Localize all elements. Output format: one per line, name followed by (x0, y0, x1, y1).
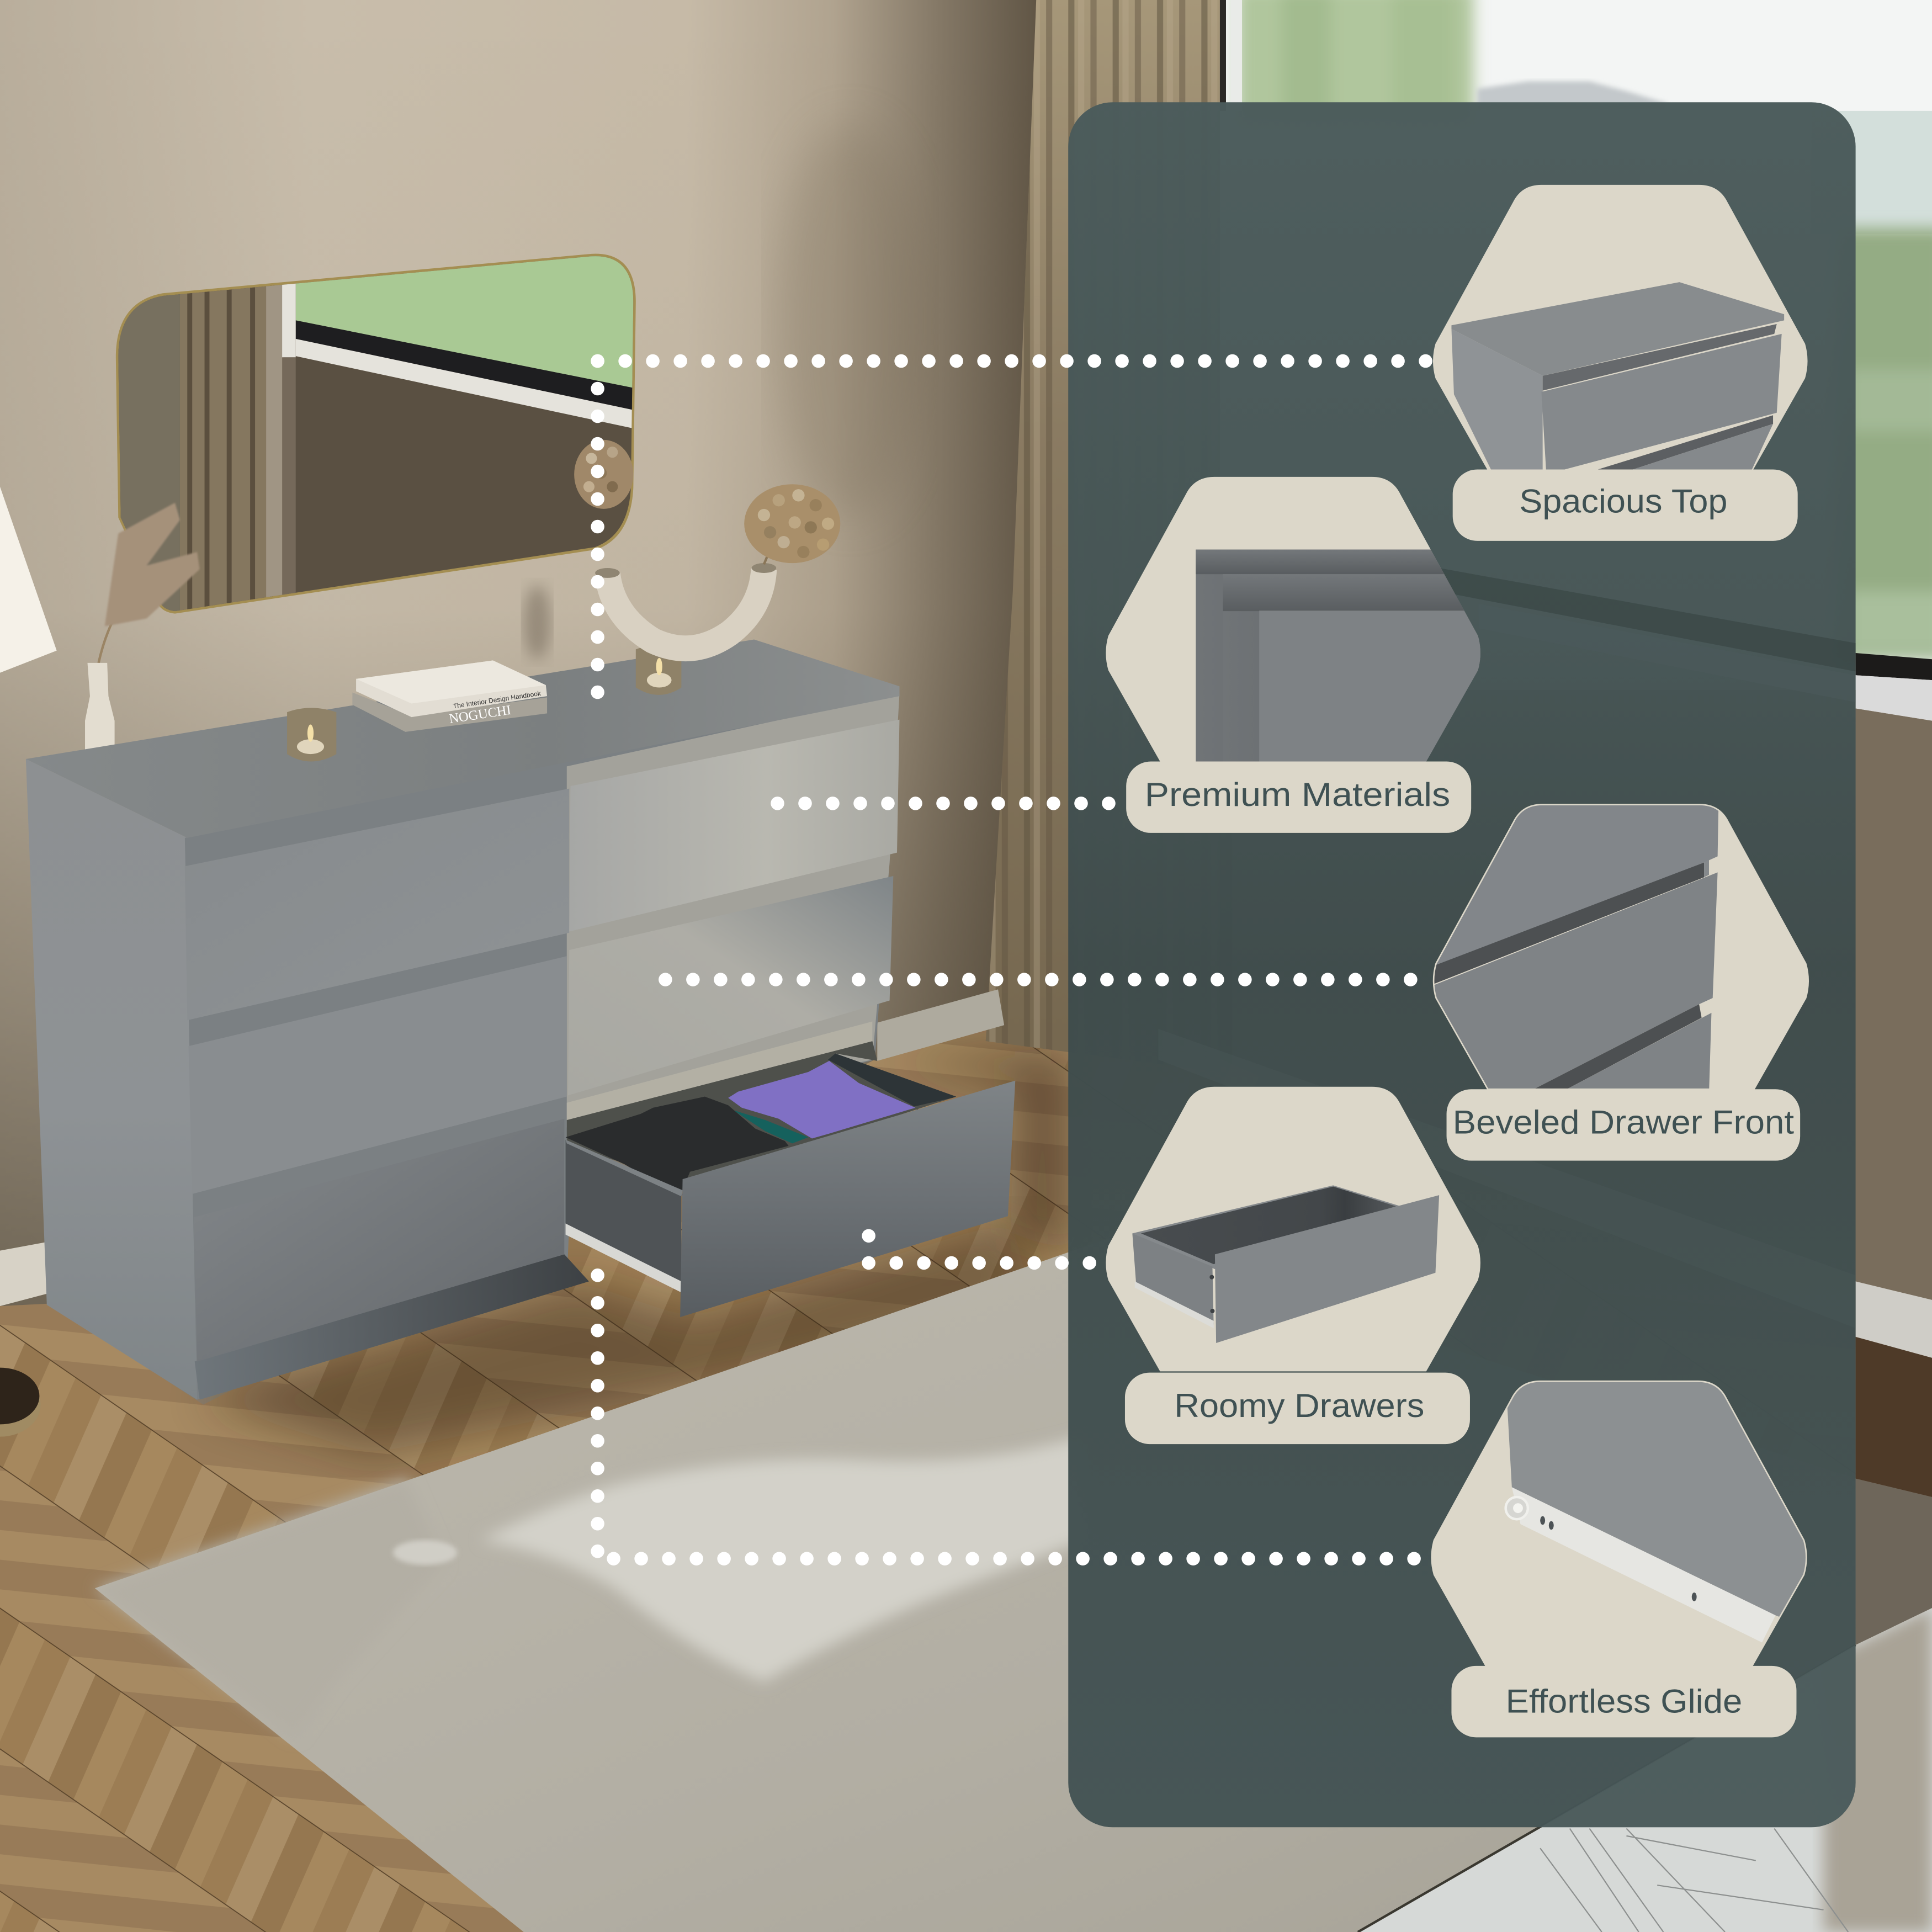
close-up dresser top (1451, 282, 1784, 474)
vase shadow on wall (524, 585, 551, 659)
U-shaped vase (595, 563, 776, 649)
feature: Effortless Glide (1432, 1355, 1836, 1737)
drawer left 1 (185, 789, 569, 1020)
close-up layered panels (1196, 550, 1494, 771)
dresser side (26, 759, 197, 1400)
open drawer (566, 1021, 1015, 1317)
right wall and baseboard (1856, 653, 1932, 1358)
label: Beveled Drawer Front: Beveled Drawer Front (1453, 1103, 1794, 1141)
label: Spacious Top: Spacious Top (1519, 482, 1727, 520)
floor (0, 1010, 1932, 1932)
drawer right 2 (568, 876, 893, 1095)
floor shadows (197, 1047, 1072, 1454)
ribbed vase (85, 663, 115, 762)
candle left (287, 708, 336, 761)
label: Roomy Drawers: Roomy Drawers (1174, 1387, 1424, 1424)
dresser top (26, 639, 899, 838)
drawer right 1 (569, 720, 899, 932)
rug (95, 1238, 1932, 1932)
drawer side (566, 1140, 683, 1285)
clothes black (566, 1097, 789, 1193)
label: Premium Materials: Premium Materials (1145, 776, 1450, 813)
feature: Beveled Drawer Front (1417, 789, 1808, 1161)
baseboards (0, 989, 1004, 1306)
close-up drawer fronts (1417, 789, 1719, 1094)
label: Premium Materials (1126, 761, 1471, 833)
dresser (26, 639, 1015, 1400)
lamp base (0, 1368, 41, 1437)
label: Spacious Top (1453, 469, 1798, 541)
wall (0, 0, 1232, 1355)
drawer left 2 (189, 956, 567, 1194)
mirror (111, 234, 641, 616)
close-up drawer slide (1504, 1355, 1836, 1642)
feature: Premium Materials (1106, 477, 1494, 833)
close-up empty drawer (1132, 1185, 1439, 1343)
label: Effortless Glide: Effortless Glide (1506, 1682, 1742, 1720)
feature: Spacious Top (1433, 185, 1808, 541)
drawer front (680, 1081, 1015, 1317)
label: Roomy Drawers (1125, 1373, 1470, 1444)
drawer cavity (567, 1041, 956, 1183)
drawer left 3 (193, 1119, 564, 1362)
dried flowers right (744, 484, 840, 564)
books (352, 660, 547, 732)
plinth (195, 1254, 589, 1400)
feature: Roomy Drawers (1106, 1087, 1480, 1444)
curtain (986, 0, 1220, 1072)
dried pampas (99, 503, 200, 663)
label: Effortless Glide (1451, 1666, 1796, 1737)
dried flowers reflection (574, 440, 633, 509)
candle right (636, 645, 681, 695)
label: Beveled Drawer Front (1447, 1089, 1800, 1161)
books: The Interior Design Handbook (453, 689, 542, 710)
dresser carcass front (185, 694, 899, 1400)
lamp shade (0, 487, 57, 673)
clothes teal (733, 1110, 808, 1143)
dotted connector lines (598, 361, 1431, 1559)
books: NOGUCHI (448, 703, 512, 726)
clothes purple (728, 1061, 915, 1138)
right window (1220, 0, 1932, 690)
panel: features (1068, 102, 1856, 1827)
